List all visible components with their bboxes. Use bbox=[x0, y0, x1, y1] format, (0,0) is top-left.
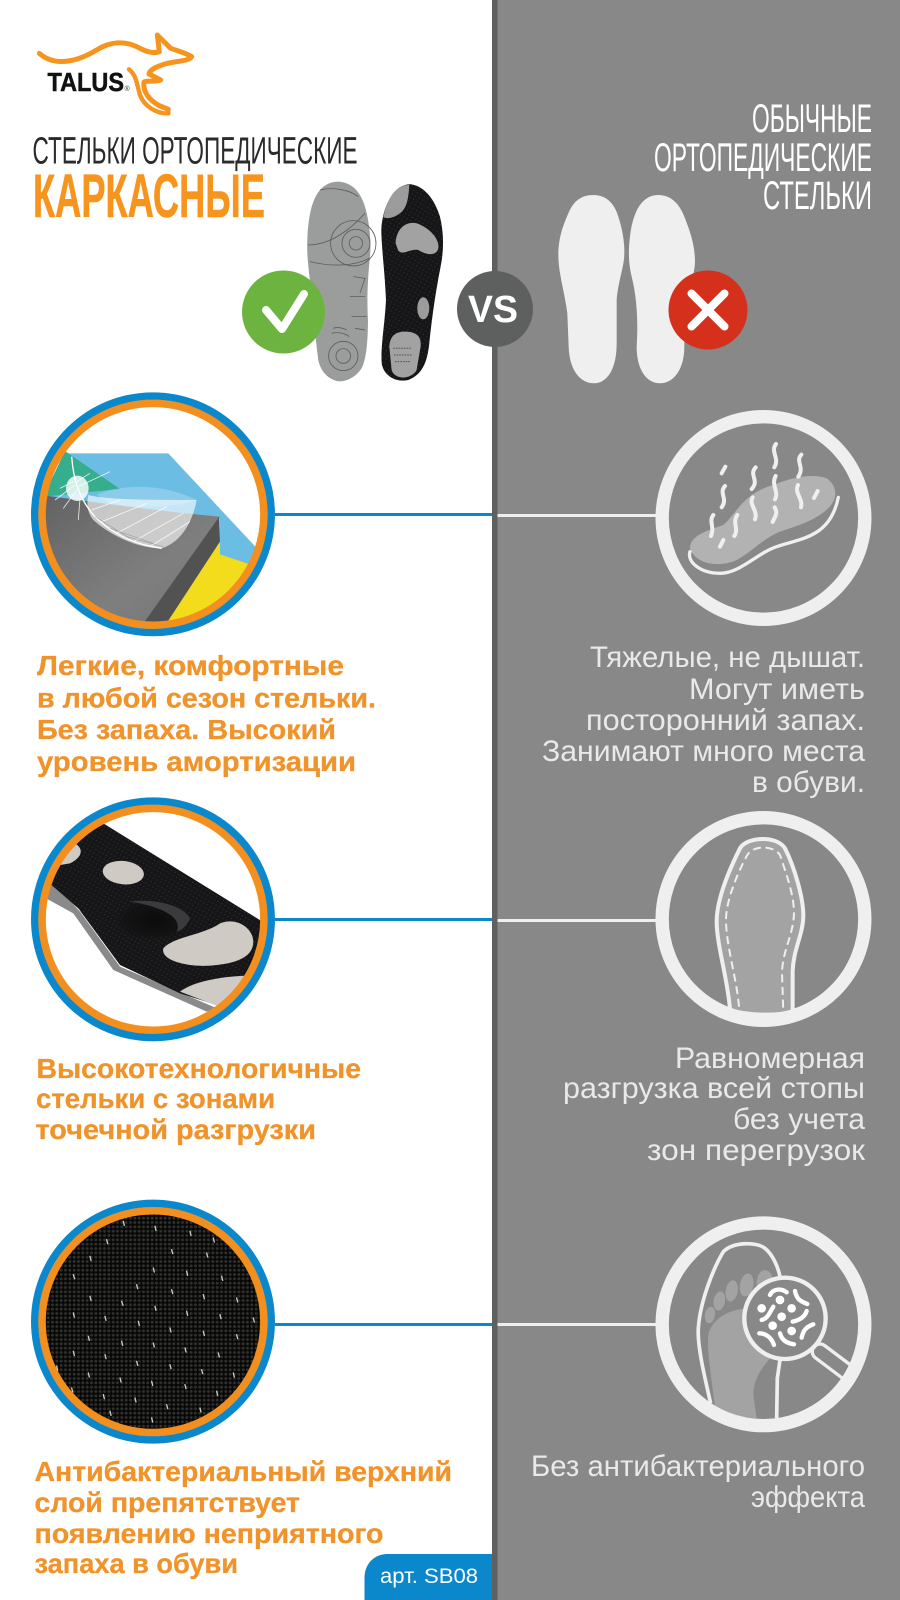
photo circle: foam with feather bbox=[35, 396, 271, 633]
stitching bbox=[726, 847, 794, 1013]
title: left heading bbox=[32, 130, 358, 230]
insole shape bbox=[690, 476, 835, 564]
icon: VS badge: VS bbox=[468, 289, 518, 331]
metatarsal dent bbox=[120, 902, 186, 938]
photo: Talus insoles pair bbox=[307, 182, 443, 381]
black insole underside bbox=[381, 184, 443, 381]
text block: right row 1: Занимают много места bbox=[542, 735, 865, 768]
connector: row 2 blue bbox=[275, 918, 492, 921]
connector: row 1 blue bbox=[275, 513, 492, 516]
icon: VS badge bbox=[457, 271, 533, 347]
text block: right row 1: Тяжелые, не дышат. bbox=[590, 641, 865, 674]
badge: article number: арт. SB08 bbox=[380, 1565, 478, 1588]
text block: right row 3: эффекта bbox=[751, 1481, 865, 1514]
text block: left row 2: Высокотехнологичные bbox=[36, 1053, 361, 1084]
panel: right grey background bbox=[492, 0, 900, 1600]
title: right heading bbox=[654, 97, 872, 218]
text block: left row 3 bbox=[34, 1456, 452, 1579]
text block: left row 3: запаха в обуви bbox=[34, 1548, 238, 1579]
ring: blue bbox=[35, 396, 271, 633]
logo wordmark: TALUS bbox=[48, 67, 124, 97]
text block: right row 2: зон перегрузок bbox=[647, 1134, 866, 1167]
text block: left row 2: точечной разгрузки bbox=[36, 1114, 316, 1145]
text block: right row 2 bbox=[563, 1042, 866, 1167]
illustration: plain white insoles bbox=[558, 195, 695, 383]
ring bbox=[662, 417, 865, 619]
left plain insole bbox=[558, 195, 624, 383]
text block: left row 1: в любой сезон стельки. bbox=[37, 682, 376, 714]
text block: right row 3 bbox=[531, 1450, 865, 1514]
ring: orange bbox=[42, 403, 264, 625]
registered mark: ® bbox=[124, 85, 130, 93]
logo: Talus kangaroo bbox=[39, 35, 192, 113]
feather bbox=[55, 457, 197, 548]
ring: blue bbox=[35, 1203, 271, 1440]
heading line two: КАРКАСНЫЕ bbox=[33, 162, 265, 230]
icon: kangaroo outline bbox=[39, 35, 192, 113]
text block: right row 1: посторонний запах. bbox=[586, 704, 865, 737]
toes bbox=[704, 1270, 773, 1324]
ring: orange bbox=[42, 808, 264, 1030]
icon: green check badge bbox=[242, 270, 325, 354]
bacteria bbox=[757, 1290, 813, 1345]
foot outline bbox=[698, 1244, 780, 1418]
text block: left row 1: Легкие, комфортные bbox=[37, 650, 344, 681]
connector: row 1 white bbox=[498, 514, 656, 517]
badge: article number bbox=[364, 1554, 492, 1600]
text block: left row 1: уровень амортизации bbox=[37, 746, 356, 777]
connector: row 2 white bbox=[498, 919, 656, 922]
ring bbox=[662, 1223, 865, 1426]
insole edge bbox=[689, 497, 838, 573]
text block: left row 3: появлению неприятного bbox=[34, 1518, 383, 1549]
photo circle: black insole with spots bbox=[35, 801, 273, 1038]
text block: right row 2: Равномерная bbox=[675, 1042, 865, 1075]
text block: right row 2: без учета bbox=[733, 1103, 865, 1136]
text block: left row 1: Без запаха. Высокий bbox=[37, 714, 336, 745]
grey insole top side bbox=[307, 182, 376, 381]
icon: foot under magnifier with bacteria bbox=[662, 1223, 865, 1426]
text block: left row 3: Антибактериальный верхний bbox=[34, 1456, 452, 1487]
centre dark divider strip bbox=[492, 0, 498, 1600]
heading line one: СТЕЛЬКИ ОРТОПЕДИЧЕСКИЕ bbox=[32, 130, 358, 172]
right plain insole bbox=[629, 195, 695, 383]
icon: red cross badge bbox=[668, 270, 748, 350]
connector: row 3 white bbox=[498, 1323, 656, 1326]
ring bbox=[662, 818, 865, 1020]
text block: right row 2: разгрузка всей стопы bbox=[563, 1072, 865, 1105]
icon: plain insole with stitching bbox=[662, 818, 865, 1020]
icon: smelly insole bbox=[662, 417, 865, 619]
odour waves bbox=[711, 444, 818, 547]
text block: right row 1 bbox=[542, 641, 865, 799]
photo circle: black antibacterial fabric bbox=[35, 1203, 271, 1440]
magnifier handle bbox=[820, 1352, 850, 1374]
ring: orange bbox=[42, 1211, 264, 1433]
text block: right row 3: Без антибактериального bbox=[531, 1450, 865, 1483]
text block: left row 2: стельки с зонами bbox=[36, 1083, 275, 1114]
text block: right row 1: в обуви. bbox=[752, 766, 865, 799]
ring: blue bbox=[35, 801, 271, 1038]
text block: right row 1: Могут иметь bbox=[689, 673, 865, 706]
text block: left row 1 bbox=[37, 650, 376, 777]
magnifier lens bbox=[744, 1278, 826, 1359]
connector: row 3 blue bbox=[275, 1323, 492, 1326]
grey pressure spots bbox=[40, 843, 253, 1006]
text block: left row 3: слой препятствует bbox=[34, 1487, 300, 1518]
insole outline bbox=[717, 839, 803, 1015]
text block: left row 2 bbox=[36, 1053, 361, 1145]
foot sole bbox=[708, 1308, 773, 1418]
